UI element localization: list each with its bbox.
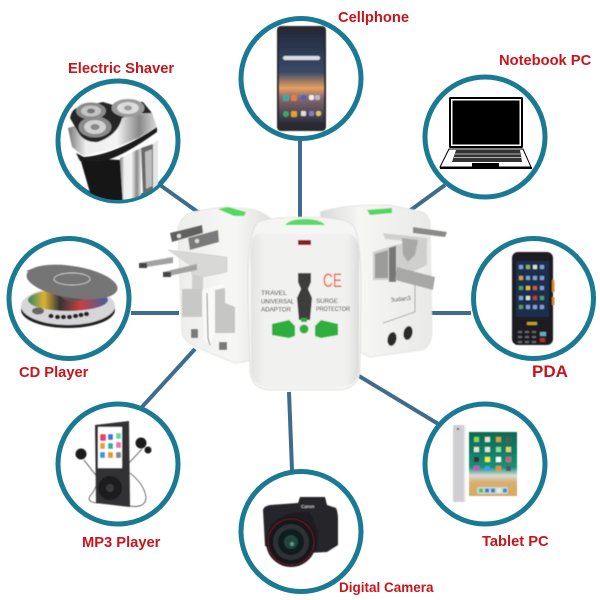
panel: cellphone	[241, 18, 361, 138]
camera brand: Canon	[301, 504, 315, 509]
shaver body	[80, 158, 123, 203]
pda icon	[512, 252, 554, 345]
left print: ADAPTOR	[261, 306, 291, 314]
shaver heads	[76, 102, 106, 120]
earphones	[76, 438, 152, 506]
inner plate edge	[383, 285, 415, 323]
mp3 player icon	[76, 421, 152, 507]
panel: cd player	[9, 238, 129, 358]
label: cellphone: Cellphone	[338, 10, 409, 26]
right adaptor	[320, 205, 447, 357]
tablet icon	[453, 425, 517, 502]
bracket	[168, 250, 227, 277]
round pins	[139, 257, 173, 268]
label: pda: PDA	[532, 362, 568, 381]
panel: digital camera	[241, 472, 361, 592]
label: electric shaver: Electric Shaver	[68, 61, 174, 77]
label: digital camera: Digital Camera	[339, 580, 434, 595]
panel: mp3 player	[58, 404, 178, 524]
label: tablet pc: Tablet PC	[482, 534, 549, 550]
recesses	[182, 289, 202, 317]
shaver head housing	[70, 102, 152, 142]
label: cd player: CD Player	[19, 365, 89, 381]
label: notebook pc: Notebook PC	[499, 53, 592, 69]
connector lines	[131, 141, 471, 470]
adaptor back label: 3udan3	[391, 296, 412, 304]
label: mp3 player: MP3 Player	[82, 535, 161, 551]
green contacts	[272, 318, 338, 338]
panel: pda	[474, 238, 594, 358]
panel: electric shaver	[58, 81, 178, 203]
outlet slot	[297, 273, 312, 320]
prongs	[413, 227, 447, 237]
right print	[316, 298, 350, 313]
recess	[373, 240, 427, 280]
shaver collar	[68, 113, 157, 156]
left adaptor	[139, 207, 272, 363]
flat prongs	[170, 225, 203, 242]
CE mark: CE	[323, 271, 342, 292]
front adaptor	[248, 217, 361, 390]
red indicator light	[298, 240, 311, 245]
left print: UNIVERSAL	[261, 298, 294, 306]
panel: notebook pc	[425, 77, 545, 197]
cd player icon	[21, 259, 120, 328]
central adaptors	[139, 205, 447, 390]
phone icon	[277, 26, 326, 131]
left print: TRAVEL	[261, 290, 288, 297]
right print: SURGE	[316, 298, 338, 305]
left print	[261, 290, 294, 314]
laptop icon	[440, 97, 532, 169]
panel: tablet pc	[425, 404, 545, 524]
right print: PROTECTOR	[316, 306, 350, 313]
